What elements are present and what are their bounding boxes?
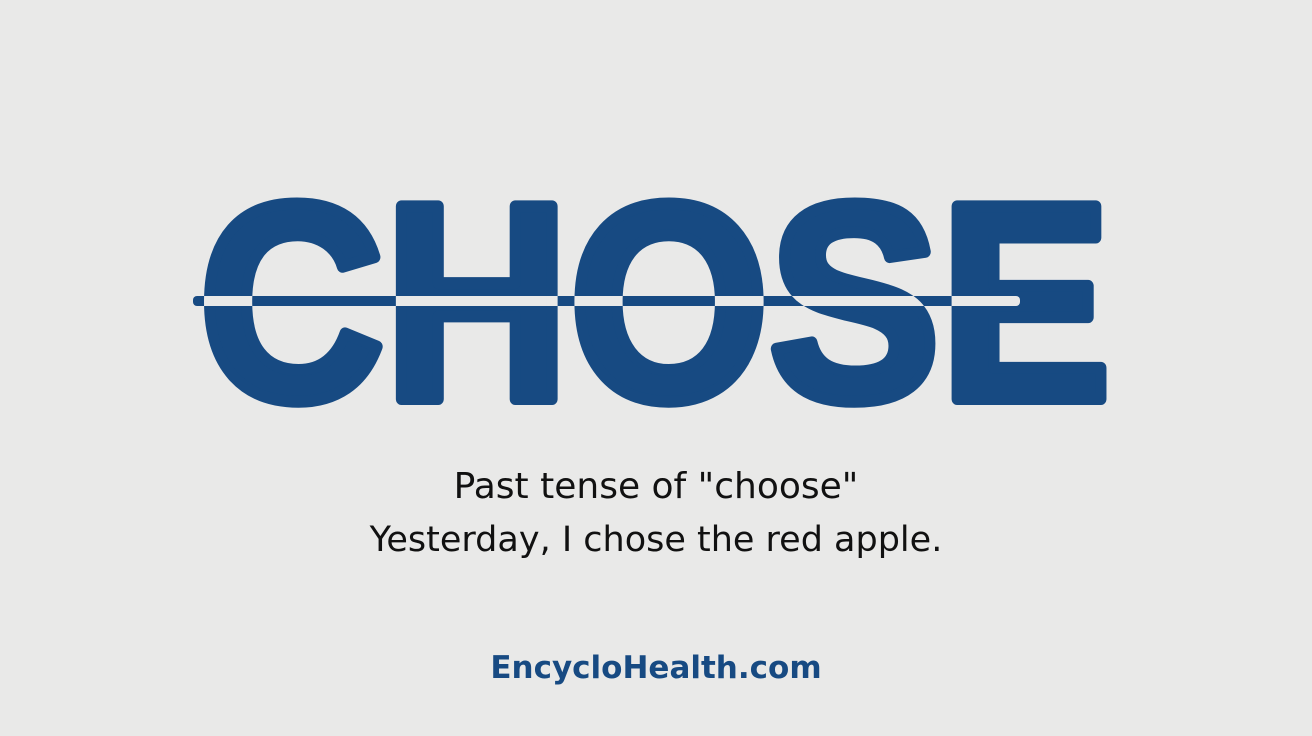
title word CHOSE: CHOSE — [199, 147, 1111, 459]
example sentence: Yesterday, I chose the red apple. — [370, 520, 942, 560]
definition text: Past tense of "choose" — [454, 466, 858, 507]
title word CHOSE: CHOSE — [199, 147, 1111, 459]
title word CHOSE — [193, 198, 1106, 408]
footer brand: EncycloHealth.com — [490, 650, 822, 686]
